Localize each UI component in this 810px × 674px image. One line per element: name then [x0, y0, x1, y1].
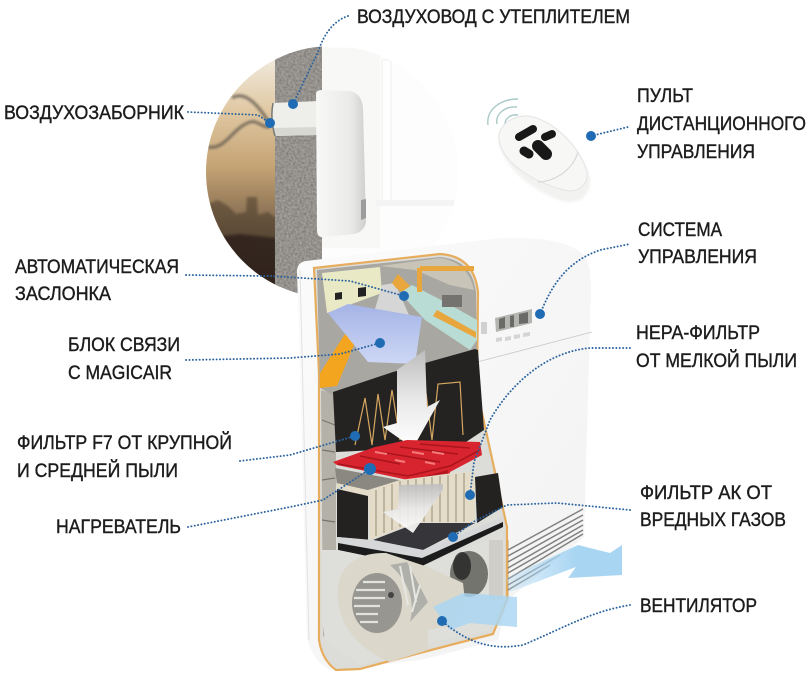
label: пульт дистанционного управления: ПУЛЬТ: [637, 85, 693, 107]
leader: вентилятор: [442, 605, 630, 647]
label: фильтр АК: [640, 482, 786, 531]
leader: пульт: [591, 127, 628, 136]
label: пульт дистанционного управления: [637, 85, 806, 163]
motor: [450, 551, 488, 597]
label: HEPA-фильтр: НЕРА-ФИЛЬТР: [636, 322, 760, 344]
dark band below heater: [335, 468, 420, 500]
blue airflow arrow lower: [433, 593, 517, 630]
control board: [322, 267, 382, 313]
label: фильтр F7: ФИЛЬТР F7 ОТ КРУПНОЙ: [17, 430, 232, 454]
control display panel: [481, 309, 532, 342]
main ventilation unit body: [297, 238, 592, 670]
top compartment: [317, 257, 477, 395]
leader: воздуховод: [293, 16, 348, 104]
fan wheel: [352, 573, 402, 633]
label: система управления: УПРАВЛЕНИЯ: [638, 246, 757, 268]
orange bracket: [320, 334, 356, 388]
blue airflow arrow upper: [506, 545, 622, 592]
label: фильтр F7: [17, 430, 232, 482]
remote body: [499, 117, 590, 202]
leader: F7 filter: [240, 436, 355, 461]
leader: нагреватель: [188, 469, 370, 527]
label: система управления: СИСТЕМА: [638, 219, 722, 241]
window: [376, 60, 454, 206]
label: фильтр АК: ВРЕДНЫХ ГАЗОВ: [640, 509, 786, 531]
sky and polluted city: [206, 60, 280, 287]
marker dots: [265, 99, 596, 626]
white air arrow lower: [383, 484, 443, 533]
carbon filter left black block: [337, 483, 368, 540]
label: блок связи: С MAGICAIR: [68, 362, 172, 384]
leader: HEPA filter: [470, 348, 630, 495]
automatic damper: [372, 283, 412, 322]
label: воздухозаборник: ВОЗДУХОЗАБОРНИК: [4, 102, 185, 124]
label: нагреватель: НАГРЕВАТЕЛЬ: [56, 516, 181, 538]
carbon filter pleats: [368, 472, 475, 540]
carbon sheet: [373, 523, 475, 550]
cutaway interior: [314, 254, 508, 670]
label: HEPA-фильтр: [636, 322, 797, 372]
leader: блок связи: [186, 343, 380, 360]
air duct pipe: [272, 101, 318, 136]
wall mounted air intake unit: [316, 90, 366, 237]
left inner wall: [321, 390, 336, 640]
illustration: outdoor circle with wall and window: [200, 40, 462, 300]
fan housing: [338, 553, 466, 662]
label: блок связи: БЛОК СВЯЗИ: [68, 334, 180, 356]
F7 filter block: [333, 349, 484, 452]
label: пульт дистанционного управления: УПРАВЛЕНИЯ: [637, 141, 755, 163]
label: фильтр F7: И СРЕДНЕЙ ПЫЛИ: [17, 458, 178, 482]
carbon filter right block: [475, 473, 503, 523]
label: система управления: [638, 219, 757, 268]
red heater: [333, 440, 482, 488]
remote buttons: [519, 129, 552, 154]
label: блок связи: [68, 334, 180, 384]
white air arrow upper: [383, 350, 440, 448]
filter plate: [338, 517, 503, 558]
label: автоматическая заслонка: ЗАСЛОНКА: [15, 283, 111, 305]
label: воздуховод с утеплителем: ВОЗДУХОВОД С УТЕПЛИТЕЛЕМ: [357, 6, 630, 28]
label: вентилятор: ВЕНТИЛЯТОР: [640, 595, 757, 617]
remote control: [488, 99, 590, 202]
leader: фильтр АК: [453, 503, 630, 537]
label: автоматическая заслонка: [15, 256, 179, 305]
label: HEPA-фильтр: ОТ МЕЛКОЙ ПЫЛИ: [636, 348, 797, 372]
orange cutaway edge: [314, 254, 507, 670]
label: автоматическая заслонка: АВТОМАТИЧЕСКАЯ: [15, 256, 179, 278]
leader: воздухозаборник: [188, 112, 270, 123]
wall: [275, 40, 322, 300]
louvers: [508, 509, 583, 590]
MagicAir communication block: [328, 304, 422, 364]
label: фильтр АК: ФИЛЬТР АК ОТ: [640, 482, 772, 504]
signal arcs: [488, 99, 518, 125]
leader: автоматическая заслонка: [186, 275, 404, 296]
leader: система управления: [540, 244, 630, 314]
fan compartment: [322, 533, 503, 665]
